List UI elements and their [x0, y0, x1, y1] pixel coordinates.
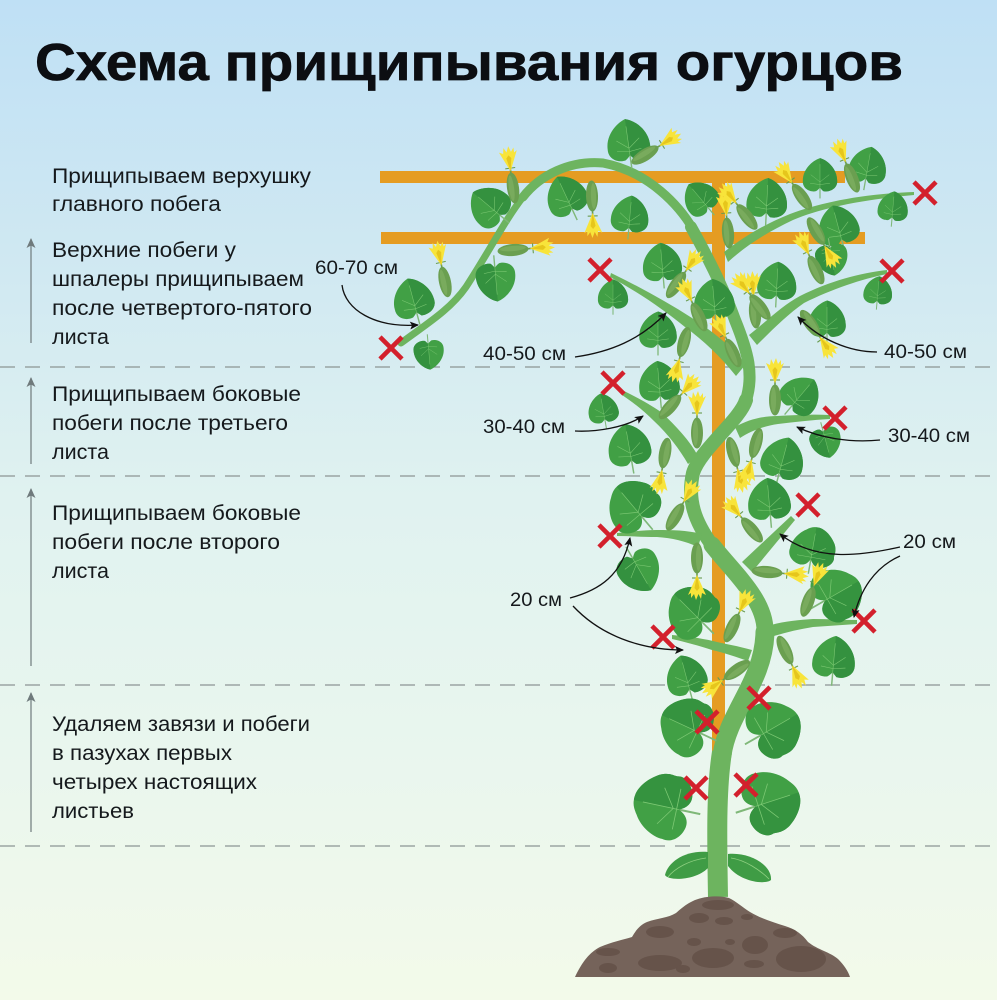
step text: lower leaves: листьев [52, 800, 134, 823]
measurement arrows [342, 285, 900, 650]
measurement labels: 20 см [903, 532, 956, 553]
step text: second leaf: листа [52, 560, 109, 583]
measurement labels: 30-40 см [888, 426, 970, 447]
step arrow: lower leaves [30, 693, 32, 832]
measurement labels: 40-50 см [483, 344, 566, 365]
step text: top shoot: главного побега [52, 193, 221, 216]
leaves: lower true leaves [627, 689, 812, 846]
step arrow: third leaf [30, 378, 32, 464]
soil mound [575, 896, 850, 977]
step text: third leaf: побеги после третьего [52, 412, 288, 435]
cucumbers with flowers [427, 125, 866, 701]
step text: lower leaves: Удаляем завязи и побеги [52, 713, 310, 736]
trellis [380, 171, 865, 756]
step text: upper shoots: Верхние побеги у [52, 239, 237, 262]
step arrow: upper shoots [30, 239, 32, 343]
step text: upper shoots: листа [52, 326, 109, 349]
step text: top shoot [52, 165, 312, 216]
step text: third leaf [52, 383, 301, 464]
cotyledon leaves [665, 852, 771, 882]
step text: third leaf: листа [52, 441, 109, 464]
step text: second leaf: Прищипываем боковые [52, 502, 301, 525]
dashed level dividers [0, 367, 997, 846]
step text: upper shoots: после четвертого-пятого [52, 297, 312, 320]
step text: second leaf: побеги после второго [52, 531, 280, 554]
leaves: middle section [585, 359, 872, 707]
step text: lower leaves [52, 713, 310, 823]
step text: upper shoots: шпалеры прищипываем [52, 268, 304, 291]
step text: second leaf [52, 502, 301, 583]
leaves: top section [388, 116, 909, 371]
measurement labels: 60-70 см [315, 258, 398, 279]
measurement labels: 20 см [510, 590, 562, 611]
step text: lower leaves: в пазухах первых [52, 742, 233, 765]
step text: third leaf: Прищипываем боковые [52, 383, 301, 406]
pinch marks [380, 182, 936, 799]
step text: upper shoots [52, 239, 312, 349]
measurement labels: 30-40 см [483, 417, 565, 438]
step arrow: second leaf [30, 489, 32, 666]
step text: top shoot: Прищипываем верхушку [52, 165, 312, 188]
title: Схема прищипывания огурцов [35, 34, 903, 92]
step text: lower leaves: четырех настоящих [52, 771, 258, 794]
main stem and side shoots [401, 163, 914, 897]
measurement labels [315, 258, 970, 611]
measurement labels: 40-50 см [884, 342, 967, 363]
